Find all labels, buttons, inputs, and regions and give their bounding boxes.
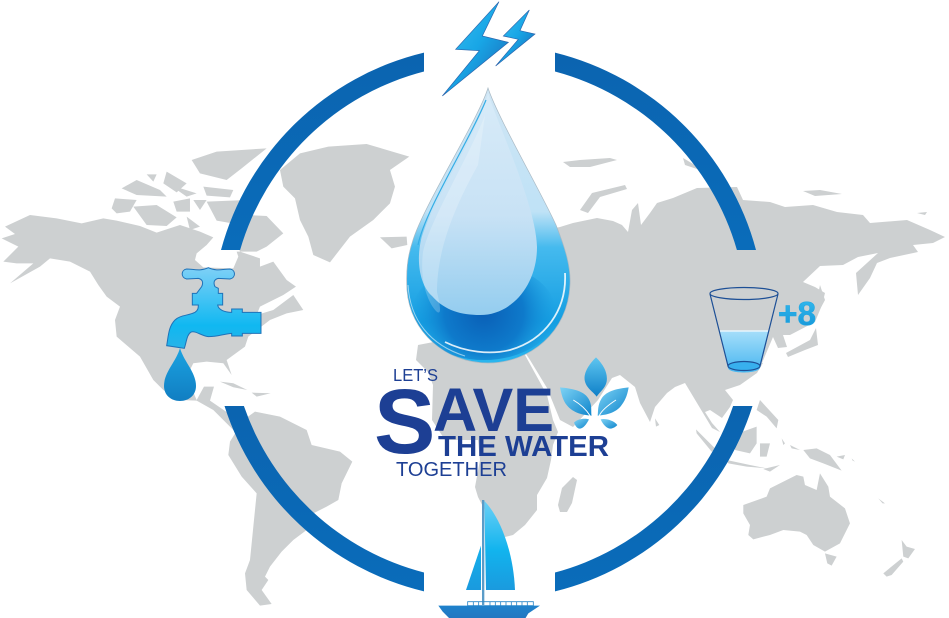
- arc: lower right: [555, 406, 752, 591]
- jib: [466, 546, 481, 590]
- text: THE WATER: THE WATER: [438, 431, 609, 463]
- icon: sailboat: [438, 500, 540, 618]
- icon: lightning bolts: [442, 2, 535, 96]
- slogan text: [374, 365, 609, 481]
- glass: [710, 288, 778, 372]
- tap body: [167, 268, 261, 348]
- text: S: S: [374, 371, 435, 473]
- map: Africa: [416, 335, 558, 537]
- blue ring: four arcs: [221, 53, 756, 591]
- map: Madagascar: [558, 477, 577, 512]
- world map: [2, 144, 945, 606]
- falling drop: [164, 348, 196, 401]
- text: TOGETHER: TOGETHER: [396, 459, 507, 481]
- map: Arctic Russian islands: [563, 158, 927, 215]
- hull: [438, 606, 540, 618]
- map: North America: [2, 144, 409, 430]
- arc: lower left: [224, 406, 424, 591]
- text: AVE: AVE: [433, 376, 554, 444]
- icon: water tap: [164, 268, 261, 401]
- map: Japan and Sakhalin: [786, 285, 825, 357]
- icon: glass of water with plus eight: [710, 288, 816, 372]
- arc: upper left: [221, 53, 424, 250]
- map: Tasmania: [825, 553, 837, 566]
- icon: large water drop: [407, 88, 570, 363]
- map: Caribbean islands: [220, 382, 271, 397]
- main sail: [484, 501, 515, 590]
- map: Southeast Asia and Oceania: [655, 400, 915, 577]
- icon: leaves: [560, 357, 629, 429]
- map: New Zealand: [883, 540, 915, 577]
- arc: upper right: [555, 53, 756, 250]
- map: Greenland: [280, 144, 409, 262]
- map: Australia: [743, 473, 850, 552]
- map: South America: [228, 412, 352, 606]
- rail: [468, 602, 533, 606]
- text: LET'S: LET’S: [393, 365, 438, 385]
- map: Eurasia: [520, 187, 945, 432]
- label: plus eight: +8: [778, 295, 816, 332]
- map: Iceland: [380, 237, 407, 248]
- map: Arctic islands: [112, 148, 267, 230]
- mast: [482, 500, 484, 605]
